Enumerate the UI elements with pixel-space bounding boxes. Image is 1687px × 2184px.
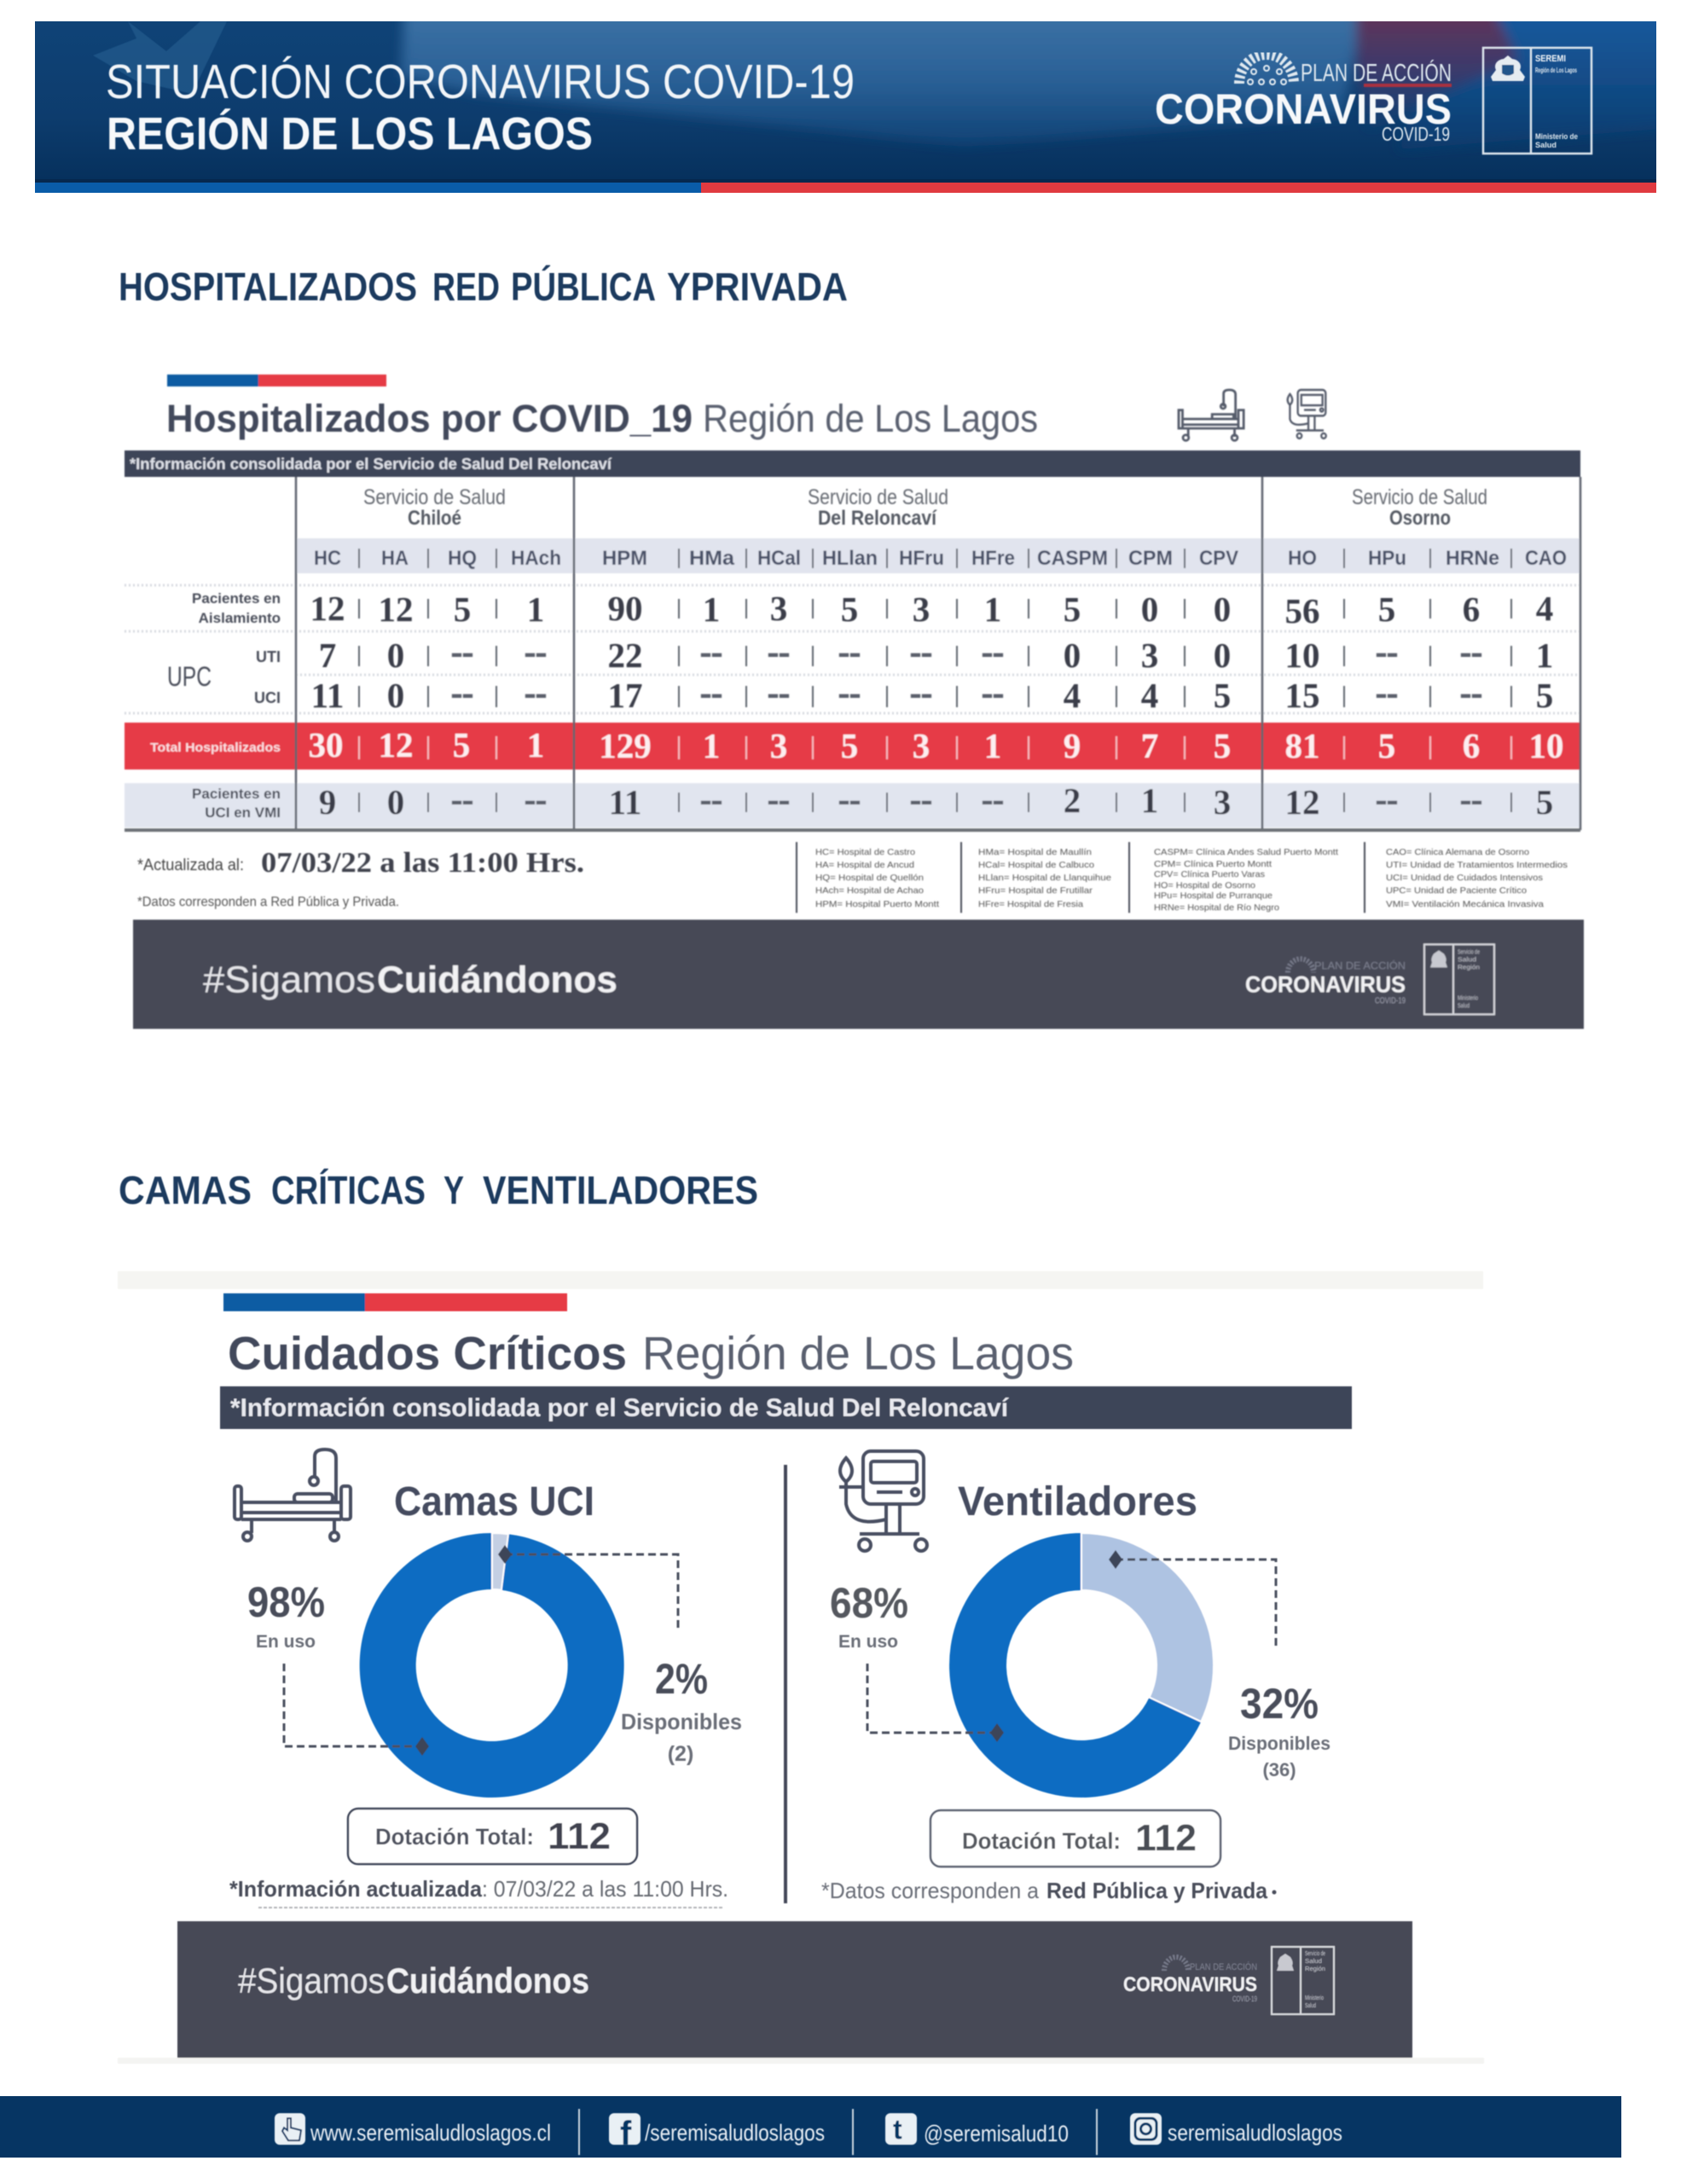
header banner <box>35 21 1656 193</box>
row: UCI: -- <box>451 681 473 707</box>
row: pacientes en aislamiento: 1 <box>703 590 720 629</box>
update note: 07/03/22 a las 11:00 Hrs. <box>261 847 584 879</box>
info bar: *Información consolidada por el Servicio de Salud Del Reloncaví <box>130 456 612 473</box>
row: UTI: 7 <box>319 636 336 675</box>
donut: ventiladores <box>949 1533 1214 1798</box>
panel: hospitalizados table <box>125 375 1584 1029</box>
logo: seremi seal <box>1483 48 1591 154</box>
row: total hospitalizados: 12 <box>379 725 413 764</box>
icon: web <box>275 2113 305 2145</box>
box: dotación ventiladores <box>930 1810 1220 1867</box>
note: información actualizada <box>229 1876 728 1908</box>
row: pacientes en aislamiento: 6 <box>1463 590 1480 629</box>
service headings: Osorno <box>1389 507 1451 530</box>
row labels: UCI <box>254 689 281 706</box>
legend: HFre= Hospital de Fresia <box>978 899 1083 909</box>
row: total hospitalizados: 7 <box>1141 726 1158 765</box>
row: pacientes en aislamiento: 5 <box>1064 590 1081 629</box>
logo: seremi seal: Región de Los Lagos <box>1535 66 1577 74</box>
heading: hospitalizados <box>119 264 848 309</box>
row: UCI: 5 <box>1214 676 1231 715</box>
column separators <box>359 549 1511 812</box>
update note <box>137 847 584 909</box>
row: pacientes en UCI en VMI: -- <box>700 787 722 814</box>
info bar <box>125 450 1580 477</box>
footer band table: COVID-19 <box>1375 996 1406 1006</box>
legend: HRNe= Hospital de Río Negro <box>1154 903 1279 913</box>
info bar <box>220 1386 1352 1429</box>
legend: UCI= Unidad de Cuidados Intensivos <box>1386 873 1543 883</box>
footer band table: CORONAVIRUS <box>1245 972 1406 997</box>
stat: ventiladores disponibles <box>1228 1680 1330 1780</box>
panel title <box>228 1327 1074 1380</box>
row: pacientes en aislamiento: 90 <box>607 589 643 628</box>
legend: HQ= Hospital de Quellón <box>815 873 924 883</box>
hospital codes: HC <box>314 547 341 570</box>
row: UCI: 4 <box>1064 676 1081 715</box>
row: pacientes en aislamiento: 12 <box>310 589 345 628</box>
row: total hospitalizados: 6 <box>1463 726 1480 765</box>
row: pacientes en UCI en VMI: 11 <box>609 782 641 822</box>
hospital codes: CPV <box>1199 547 1238 570</box>
logo: plan de acción coronavirus <box>1155 55 1452 145</box>
service headings: Chiloé <box>408 507 461 530</box>
footer band cuidados: #Sigamos <box>238 1960 385 2001</box>
hospital codes: HLlan <box>822 547 878 570</box>
row: UTI: -- <box>1376 640 1398 666</box>
row: pacientes en UCI en VMI: 5 <box>1536 782 1553 822</box>
row: UCI: -- <box>700 681 722 707</box>
heading: hospitalizados: HOSPITALIZADOS <box>119 264 417 309</box>
legend: HPu= Hospital de Purranque <box>1154 891 1272 901</box>
callout: ventiladores en uso leader <box>867 1664 1004 1742</box>
table title: Región de Los Lagos <box>703 397 1038 440</box>
row: UTI: 0 <box>1064 636 1081 675</box>
logo: plan de acción coronavirus: PLAN DE ACCIÓN <box>1301 59 1452 87</box>
stat: ventiladores en uso <box>830 1579 908 1652</box>
row: total hospitalizados: 5 <box>1378 726 1395 765</box>
row: pacientes en UCI en VMI <box>319 781 1553 822</box>
footer band table: Salud <box>1458 957 1476 963</box>
row: UCI: 17 <box>607 676 643 715</box>
legend: HA= Hospital de Ancud <box>815 860 914 870</box>
callout: camas en uso leader <box>284 1664 429 1756</box>
website link: www.seremisaludloslagos.cl <box>310 2120 551 2146</box>
row: pacientes en UCI en VMI: 1 <box>1141 781 1158 820</box>
legend: HMa= Hospital de Maullín <box>978 847 1092 857</box>
row: UCI: 15 <box>1284 676 1320 715</box>
header title <box>106 55 855 160</box>
heading: camas críticas <box>119 1168 758 1212</box>
footer band table: Salud <box>1458 1003 1470 1009</box>
table title: Hospitalizados por COVID_19 <box>166 397 693 440</box>
row: total hospitalizados: 5 <box>1214 726 1231 765</box>
row: total hospitalizados: 3 <box>770 726 787 765</box>
row: UTI: -- <box>838 640 861 666</box>
legend: HCal= Hospital de Calbuco <box>978 860 1094 870</box>
row: total hospitalizados: 1 <box>527 725 544 764</box>
hospital codes: HFru <box>899 547 944 570</box>
row: pacientes en UCI en VMI: -- <box>768 787 790 814</box>
legend: HPM= Hospital Puerto Montt <box>815 899 939 909</box>
hospital codes: HO <box>1288 547 1317 570</box>
row: UTI: 3 <box>1141 636 1158 675</box>
legend: CPM= Clínica Puerto Montt <box>1154 859 1272 869</box>
total row band <box>125 723 1580 770</box>
row labels: Pacientes en <box>192 786 281 802</box>
accent bar <box>167 375 386 386</box>
row: pacientes en UCI en VMI: 2 <box>1064 781 1081 820</box>
service headings: Servicio de Salud <box>1352 485 1487 509</box>
row: total hospitalizados: 129 <box>599 726 652 765</box>
stat: ventiladores en uso: En uso <box>838 1632 898 1652</box>
legend: CAO= Clínica Alemana de Osorno <box>1386 847 1529 857</box>
stat: camas en uso: 98% <box>247 1578 325 1626</box>
row: UCI: 4 <box>1141 676 1158 715</box>
hospital codes: HPM <box>602 547 647 570</box>
row: total hospitalizados: 9 <box>1064 726 1081 765</box>
stat: ventiladores disponibles: 32% <box>1240 1680 1319 1728</box>
update note: *Datos corresponden a Red Pública y Privada. <box>137 895 399 909</box>
icon: instagram <box>1130 2113 1162 2145</box>
hospital codes: HA <box>381 547 409 570</box>
row: UTI: -- <box>451 640 473 666</box>
note: datos corresponden: *Datos corresponden a <box>821 1878 1040 1903</box>
row: pacientes en UCI en VMI: -- <box>1376 787 1398 814</box>
row labels: UTI <box>256 648 281 665</box>
row: total hospitalizados: 5 <box>841 726 858 765</box>
icon: bed small <box>1179 390 1244 440</box>
row: total hospitalizados: 1 <box>984 726 1001 765</box>
hospital codes: CASPM <box>1037 547 1108 570</box>
callout: camas disponibles leader <box>498 1545 678 1632</box>
row: pacientes en aislamiento: 3 <box>913 590 930 629</box>
row: UCI: -- <box>1376 681 1398 707</box>
ventiladores heading: Ventiladores <box>958 1479 1197 1525</box>
legend: HC= Hospital de Castro <box>815 847 915 857</box>
service headings: Servicio de Salud <box>363 485 506 509</box>
row: UTI <box>319 636 1553 675</box>
row: UCI: -- <box>525 681 547 707</box>
panel title: Región de Los Lagos <box>642 1327 1074 1380</box>
row: total hospitalizados: 1 <box>703 726 720 765</box>
row: UCI: -- <box>1460 681 1482 707</box>
service headings: Del Reloncaví <box>818 507 937 530</box>
panel: cuidados críticos <box>118 1271 1484 2064</box>
header title: REGIÓN DE LOS LAGOS <box>107 108 593 160</box>
footer band table: #Sigamos <box>203 959 375 1001</box>
icon: tumblr: t <box>893 2114 902 2145</box>
note: datos corresponden: Red Pública y Privada <box>1046 1878 1268 1903</box>
row: pacientes en aislamiento: 0 <box>1214 590 1231 629</box>
accent bar <box>223 1293 567 1311</box>
logo: plan de acción coronavirus: CORONAVIRUS <box>1155 85 1452 133</box>
row: pacientes en aislamiento <box>310 589 1553 630</box>
row: pacientes en aislamiento: 1 <box>527 590 544 629</box>
footer band cuidados: Servicio de <box>1305 1951 1325 1957</box>
heading: camas críticas: CRÍTICAS <box>271 1168 426 1212</box>
row labels: Aislamiento <box>199 610 281 626</box>
donut: camas UCI <box>360 1533 624 1798</box>
stat: camas disponibles <box>621 1655 742 1766</box>
total row separators <box>359 736 1511 759</box>
row labels: Total Hospitalizados <box>150 741 281 755</box>
row: UTI: 10 <box>1284 636 1320 675</box>
info bar: *Información consolidada por el Servicio de Salud Del Reloncaví <box>230 1394 1010 1422</box>
footer band cuidados: Salud <box>1305 1959 1322 1965</box>
stat: camas disponibles: 2% <box>655 1655 708 1703</box>
footer band cuidados: PLAN DE ACCIÓN <box>1190 1961 1257 1972</box>
row: pacientes en aislamiento: 4 <box>1536 589 1553 628</box>
logo: seremi seal: SEREMI <box>1535 54 1566 64</box>
row: UTI: 1 <box>1536 636 1553 675</box>
hospital codes: CAO <box>1525 547 1567 570</box>
icon: facebook <box>609 2113 641 2152</box>
row: pacientes en aislamiento: 12 <box>379 590 413 629</box>
row: pacientes en UCI en VMI: 3 <box>1214 782 1231 822</box>
row: pacientes en UCI en VMI: -- <box>910 787 932 814</box>
logo: seremi seal: Salud <box>1535 141 1557 149</box>
row labels <box>150 590 281 821</box>
row: pacientes en aislamiento: 5 <box>841 590 858 629</box>
heading: camas críticas: CAMAS <box>119 1168 252 1212</box>
row: UTI: 22 <box>607 636 643 675</box>
legend: UPC= Unidad de Paciente Crítico <box>1386 886 1527 896</box>
row: UTI: 0 <box>1214 636 1231 675</box>
heading: camas críticas: Y <box>443 1168 464 1212</box>
row: pacientes en UCI en VMI: 0 <box>387 782 404 822</box>
logo: plan de acción coronavirus: COVID-19 <box>1382 123 1450 145</box>
row: UCI: 0 <box>387 676 404 715</box>
icon: ventilator <box>839 1451 927 1551</box>
icon: bed <box>235 1449 351 1541</box>
row: UTI: 0 <box>387 636 404 675</box>
stat: camas disponibles: (2) <box>668 1742 693 1766</box>
hospital codes: HPu <box>1368 547 1406 570</box>
service headings <box>363 485 1487 530</box>
row: total hospitalizados <box>309 725 1564 765</box>
top strip <box>118 1271 1483 1289</box>
footer band table: Servicio de <box>1458 950 1480 956</box>
footer band cuidados: Ministerio <box>1305 1995 1324 2001</box>
box: dotación camas: Dotación Total: <box>375 1824 534 1850</box>
row: total hospitalizados: 3 <box>913 726 930 765</box>
row: pacientes en UCI en VMI: -- <box>838 787 861 814</box>
row: UCI: -- <box>910 681 932 707</box>
row labels: UCI en VMI <box>205 804 281 821</box>
legend: HFru= Hospital de Frutillar <box>978 886 1093 896</box>
row: pacientes en UCI en VMI: -- <box>525 787 547 814</box>
heading: hospitalizados: PÚBLICA <box>511 264 656 309</box>
camas UCI heading: Camas UCI <box>394 1479 594 1525</box>
header stripe red <box>701 183 1656 193</box>
footer bar <box>0 2096 1621 2158</box>
legend: CPV= Clínica Puerto Varas <box>1154 869 1265 880</box>
row: pacientes en UCI en VMI: 9 <box>319 782 336 822</box>
row: pacientes en UCI en VMI: -- <box>1460 787 1482 814</box>
facebook link: /seremisaludloslagos <box>645 2120 825 2146</box>
row labels: UPC <box>167 661 212 692</box>
hospital codes: HCal <box>757 547 801 570</box>
row: UTI: -- <box>982 640 1004 666</box>
tumblr link: @seremisalud10 <box>924 2121 1069 2146</box>
row: UTI: -- <box>525 640 547 666</box>
hospital codes: CPM <box>1128 547 1173 570</box>
row: UCI <box>311 676 1553 715</box>
row: UTI: -- <box>1460 640 1482 666</box>
row: UCI: -- <box>982 681 1004 707</box>
box: dotación ventiladores: Dotación Total: <box>962 1828 1121 1854</box>
footer band table: PLAN DE ACCIÓN <box>1314 959 1406 972</box>
row: UCI: -- <box>838 681 861 707</box>
footer band cuidados <box>177 1921 1412 2058</box>
note: información actualizada: *Información actualizada <box>229 1876 483 1902</box>
row: total hospitalizados: 81 <box>1284 726 1320 765</box>
legend: CASPM= Clínica Andes Salud Puerto Montt <box>1154 847 1338 857</box>
row: UTI: -- <box>700 640 722 666</box>
stat: ventiladores disponibles: Disponibles <box>1228 1733 1330 1754</box>
table title <box>166 397 1038 440</box>
legend: HLlan= Hospital de Llanquihue <box>978 873 1111 883</box>
footer band table: Región <box>1458 965 1480 971</box>
hospital codes: HAch <box>511 547 561 570</box>
stat: camas en uso <box>247 1578 325 1652</box>
panel title: Cuidados Críticos <box>228 1327 627 1380</box>
service headings: Servicio de Salud <box>808 485 948 509</box>
icon: facebook: f <box>620 2115 632 2152</box>
legend: HAch= Hospital de Achao <box>815 886 924 896</box>
footer band cuidados: Salud <box>1305 2003 1316 2009</box>
heading: camas críticas: VENTILADORES <box>483 1168 758 1212</box>
hospital codes: HFre <box>971 547 1015 570</box>
hospital codes: HQ <box>448 547 477 570</box>
bottom strip <box>118 2058 1484 2064</box>
row: pacientes en aislamiento: 0 <box>1141 590 1158 629</box>
footer band table <box>133 920 1584 1029</box>
divider <box>784 1465 787 1903</box>
footer band cuidados: CORONAVIRUS <box>1123 1973 1257 1996</box>
row: total hospitalizados: 5 <box>453 725 470 764</box>
hospital code header band <box>296 538 1580 573</box>
instagram link: seremisaludloslagos <box>1168 2120 1342 2146</box>
row: UCI: 5 <box>1536 676 1553 715</box>
row: total hospitalizados: 30 <box>309 725 343 764</box>
row: pacientes en aislamiento: 3 <box>770 589 787 628</box>
legend: UTI= Unidad de Tratamientos Intermedios <box>1386 860 1568 870</box>
legend <box>797 842 1568 913</box>
row: total hospitalizados: 10 <box>1528 726 1564 765</box>
heading: hospitalizados: YPRIVADA <box>667 264 848 309</box>
callout: ventiladores disponibles leader <box>1109 1550 1276 1649</box>
row labels: Pacientes en <box>192 590 281 607</box>
box: dotación ventiladores: 112 <box>1135 1817 1197 1859</box>
hospital codes: HRNe <box>1446 547 1499 570</box>
stat: ventiladores en uso: 68% <box>830 1579 908 1627</box>
footer band cuidados: COVID-19 <box>1232 1995 1257 2003</box>
row: UCI: 11 <box>311 676 344 715</box>
box: dotación camas <box>348 1809 637 1864</box>
row: pacientes en aislamiento: 5 <box>1378 590 1395 629</box>
footer band table: Ministerio <box>1458 996 1478 1002</box>
row: pacientes en aislamiento: 5 <box>454 590 471 629</box>
box: dotación camas: 112 <box>548 1815 611 1857</box>
hospital codes <box>314 547 1567 570</box>
row: pacientes en UCI en VMI: -- <box>451 787 473 814</box>
hospital codes: HMa <box>689 547 735 570</box>
legend: VMI= Ventilación Mecánica Invasiva <box>1386 899 1544 909</box>
note: información actualizada: : 07/03/22 a las 11:00 Hrs. <box>482 1876 728 1902</box>
stat: camas disponibles: Disponibles <box>621 1709 742 1734</box>
icon: ventilator small <box>1288 390 1326 439</box>
update note: *Actualizada al: <box>137 857 244 874</box>
row: UCI: -- <box>768 681 790 707</box>
row: pacientes en aislamiento: 1 <box>984 590 1001 629</box>
stat: ventiladores disponibles: (36) <box>1262 1759 1296 1780</box>
row: pacientes en UCI en VMI: 12 <box>1284 782 1320 822</box>
footer band cuidados: Región <box>1305 1966 1325 1972</box>
logo: seremi seal: Ministerio de <box>1535 132 1578 141</box>
stat: camas en uso: En uso <box>256 1632 316 1652</box>
footer band cuidados: Cuidándonos <box>386 1960 589 2001</box>
row: pacientes en UCI en VMI: -- <box>982 787 1004 814</box>
header stripe blue <box>35 183 701 193</box>
footer band table: Cuidándonos <box>377 959 617 1001</box>
heading: hospitalizados: RED <box>432 264 500 309</box>
header title: SITUACIÓN CORONAVIRUS COVID-19 <box>106 55 855 109</box>
row: pacientes en aislamiento: 56 <box>1284 591 1320 630</box>
note: datos corresponden <box>821 1878 1276 1903</box>
VMI band background <box>125 783 1580 828</box>
row: UTI: -- <box>768 640 790 666</box>
icon: tumblr <box>885 2113 917 2145</box>
legend: HO= Hospital de Osorno <box>1154 880 1255 891</box>
row: UTI: -- <box>910 640 932 666</box>
